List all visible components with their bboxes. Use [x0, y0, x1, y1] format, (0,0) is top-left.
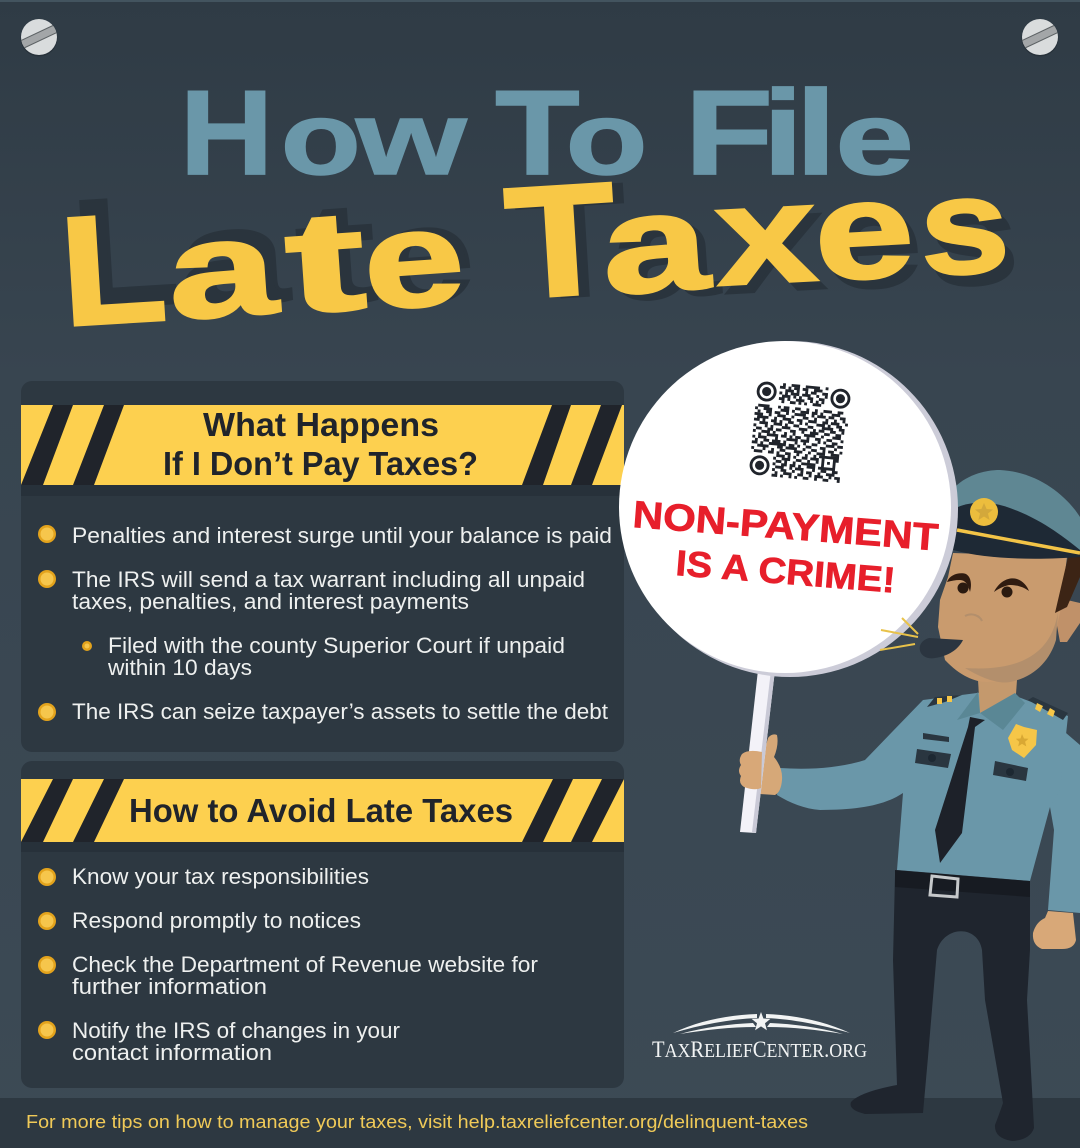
title: How To File: F — [685, 66, 773, 200]
title shadow: Late Taxes: T — [512, 150, 632, 333]
title: How To File: o — [281, 80, 361, 196]
bullet list: Know your tax responsibilities — [72, 864, 369, 889]
sign text: IS A CRIME! — [674, 542, 897, 601]
right arm — [1020, 715, 1080, 913]
title shadow: Late Taxes: a — [606, 169, 724, 330]
bullet list — [38, 864, 538, 1065]
title: How To File — [180, 66, 914, 200]
badge — [1008, 724, 1037, 758]
title shadow: Late Taxes: a — [174, 178, 294, 337]
title: How To File: o — [566, 82, 647, 196]
title: How To File: w — [355, 80, 468, 197]
sign — [619, 341, 958, 677]
right hand — [1033, 911, 1076, 949]
eyebrows — [947, 573, 1029, 592]
pockets — [915, 733, 1028, 781]
sign pole — [740, 670, 775, 833]
hat band — [953, 503, 1080, 559]
face — [938, 553, 1067, 682]
title: Late Taxes: L — [55, 179, 171, 359]
tie — [935, 717, 985, 863]
title: How To File: e — [835, 81, 914, 197]
bullet list: Check the Department of Revenue website for — [72, 952, 538, 977]
hazard banner — [21, 779, 624, 842]
title shadow: Late Taxes: s — [925, 160, 1022, 316]
heading: What Happens — [203, 406, 439, 443]
title shadow: Late Taxes — [67, 150, 1022, 342]
title: How To File: i — [763, 67, 803, 200]
logo — [652, 1012, 867, 1062]
nose — [965, 614, 982, 621]
bullet list: Filed with the county Superior Court if unpaid — [108, 633, 565, 658]
hat star — [970, 498, 998, 526]
hat stripe — [957, 530, 1080, 553]
bullet list: taxes, penalties, and interest payments — [72, 589, 469, 614]
footer text: For more tips on how to manage your taxes, visit help.taxreliefcenter.org/delinquent-taxes — [26, 1112, 808, 1132]
title: Late Taxes: T — [501, 149, 621, 332]
bullet list: within 10 days — [107, 655, 252, 680]
bullet list: The IRS can seize taxpayer’s assets to settle the debt — [72, 699, 608, 724]
heading: If I Don’t Pay Taxes? — [163, 445, 478, 482]
hair — [1055, 557, 1080, 613]
title shadow: Late Taxes: e — [818, 160, 925, 319]
title: How To File: l — [796, 67, 836, 200]
cheek shadow — [965, 612, 1058, 682]
whistle — [880, 618, 963, 658]
QR code — [749, 382, 851, 482]
shirt — [777, 690, 1068, 881]
epaulettes — [927, 695, 1068, 720]
bullet list: further information — [72, 974, 267, 999]
title: Late Taxes — [55, 149, 1013, 359]
left hand fingers — [739, 751, 762, 789]
collar — [957, 692, 1025, 730]
sign text — [631, 494, 940, 601]
title: Late Taxes: a — [597, 163, 715, 324]
buckle — [930, 876, 958, 897]
title: Late Taxes: a — [163, 190, 283, 349]
bullet list: Penalties and interest surge until your balance is paid — [72, 523, 612, 548]
logo: TAXRELIEFCENTER.ORG — [652, 1037, 867, 1062]
title shadow: Late Taxes: x — [720, 162, 828, 323]
footer band — [0, 1098, 1080, 1148]
title: Late Taxes: x — [712, 154, 820, 315]
bullet list: contact information — [72, 1040, 272, 1065]
neck — [978, 680, 1017, 713]
title: Late Taxes: t — [280, 180, 370, 344]
sign text: NON-PAYMENT — [631, 494, 940, 559]
hazard banner — [21, 405, 624, 485]
title: How To File: T — [495, 66, 580, 200]
ear — [1055, 600, 1080, 642]
bullet list: The IRS will send a tax warrant including all unpaid — [72, 567, 585, 592]
title shadow: Late Taxes: L — [67, 162, 183, 342]
icon: left screw — [20, 19, 58, 56]
hat crown — [952, 470, 1080, 555]
icon: right screw — [1022, 19, 1058, 56]
title: How To File: H — [180, 66, 273, 200]
pants — [851, 875, 1034, 1141]
bullet list: Respond promptly to notices — [72, 908, 361, 933]
belt — [895, 870, 1030, 897]
panel: what happens — [21, 381, 624, 752]
title: Late Taxes: e — [810, 151, 917, 310]
title: Late Taxes: s — [916, 149, 1013, 305]
title: Late Taxes: e — [358, 180, 469, 338]
heading — [163, 406, 478, 482]
title shadow: Late Taxes: t — [291, 172, 381, 336]
left hand palm and thumb — [760, 734, 782, 795]
title shadow: Late Taxes: e — [368, 176, 479, 334]
panel: how to avoid — [21, 761, 624, 1088]
eyes — [958, 582, 968, 594]
bullet list: Notify the IRS of changes in your — [72, 1018, 400, 1043]
bullet list — [38, 523, 612, 724]
officer — [777, 470, 1080, 1141]
heading: How to Avoid Late Taxes — [129, 792, 513, 829]
